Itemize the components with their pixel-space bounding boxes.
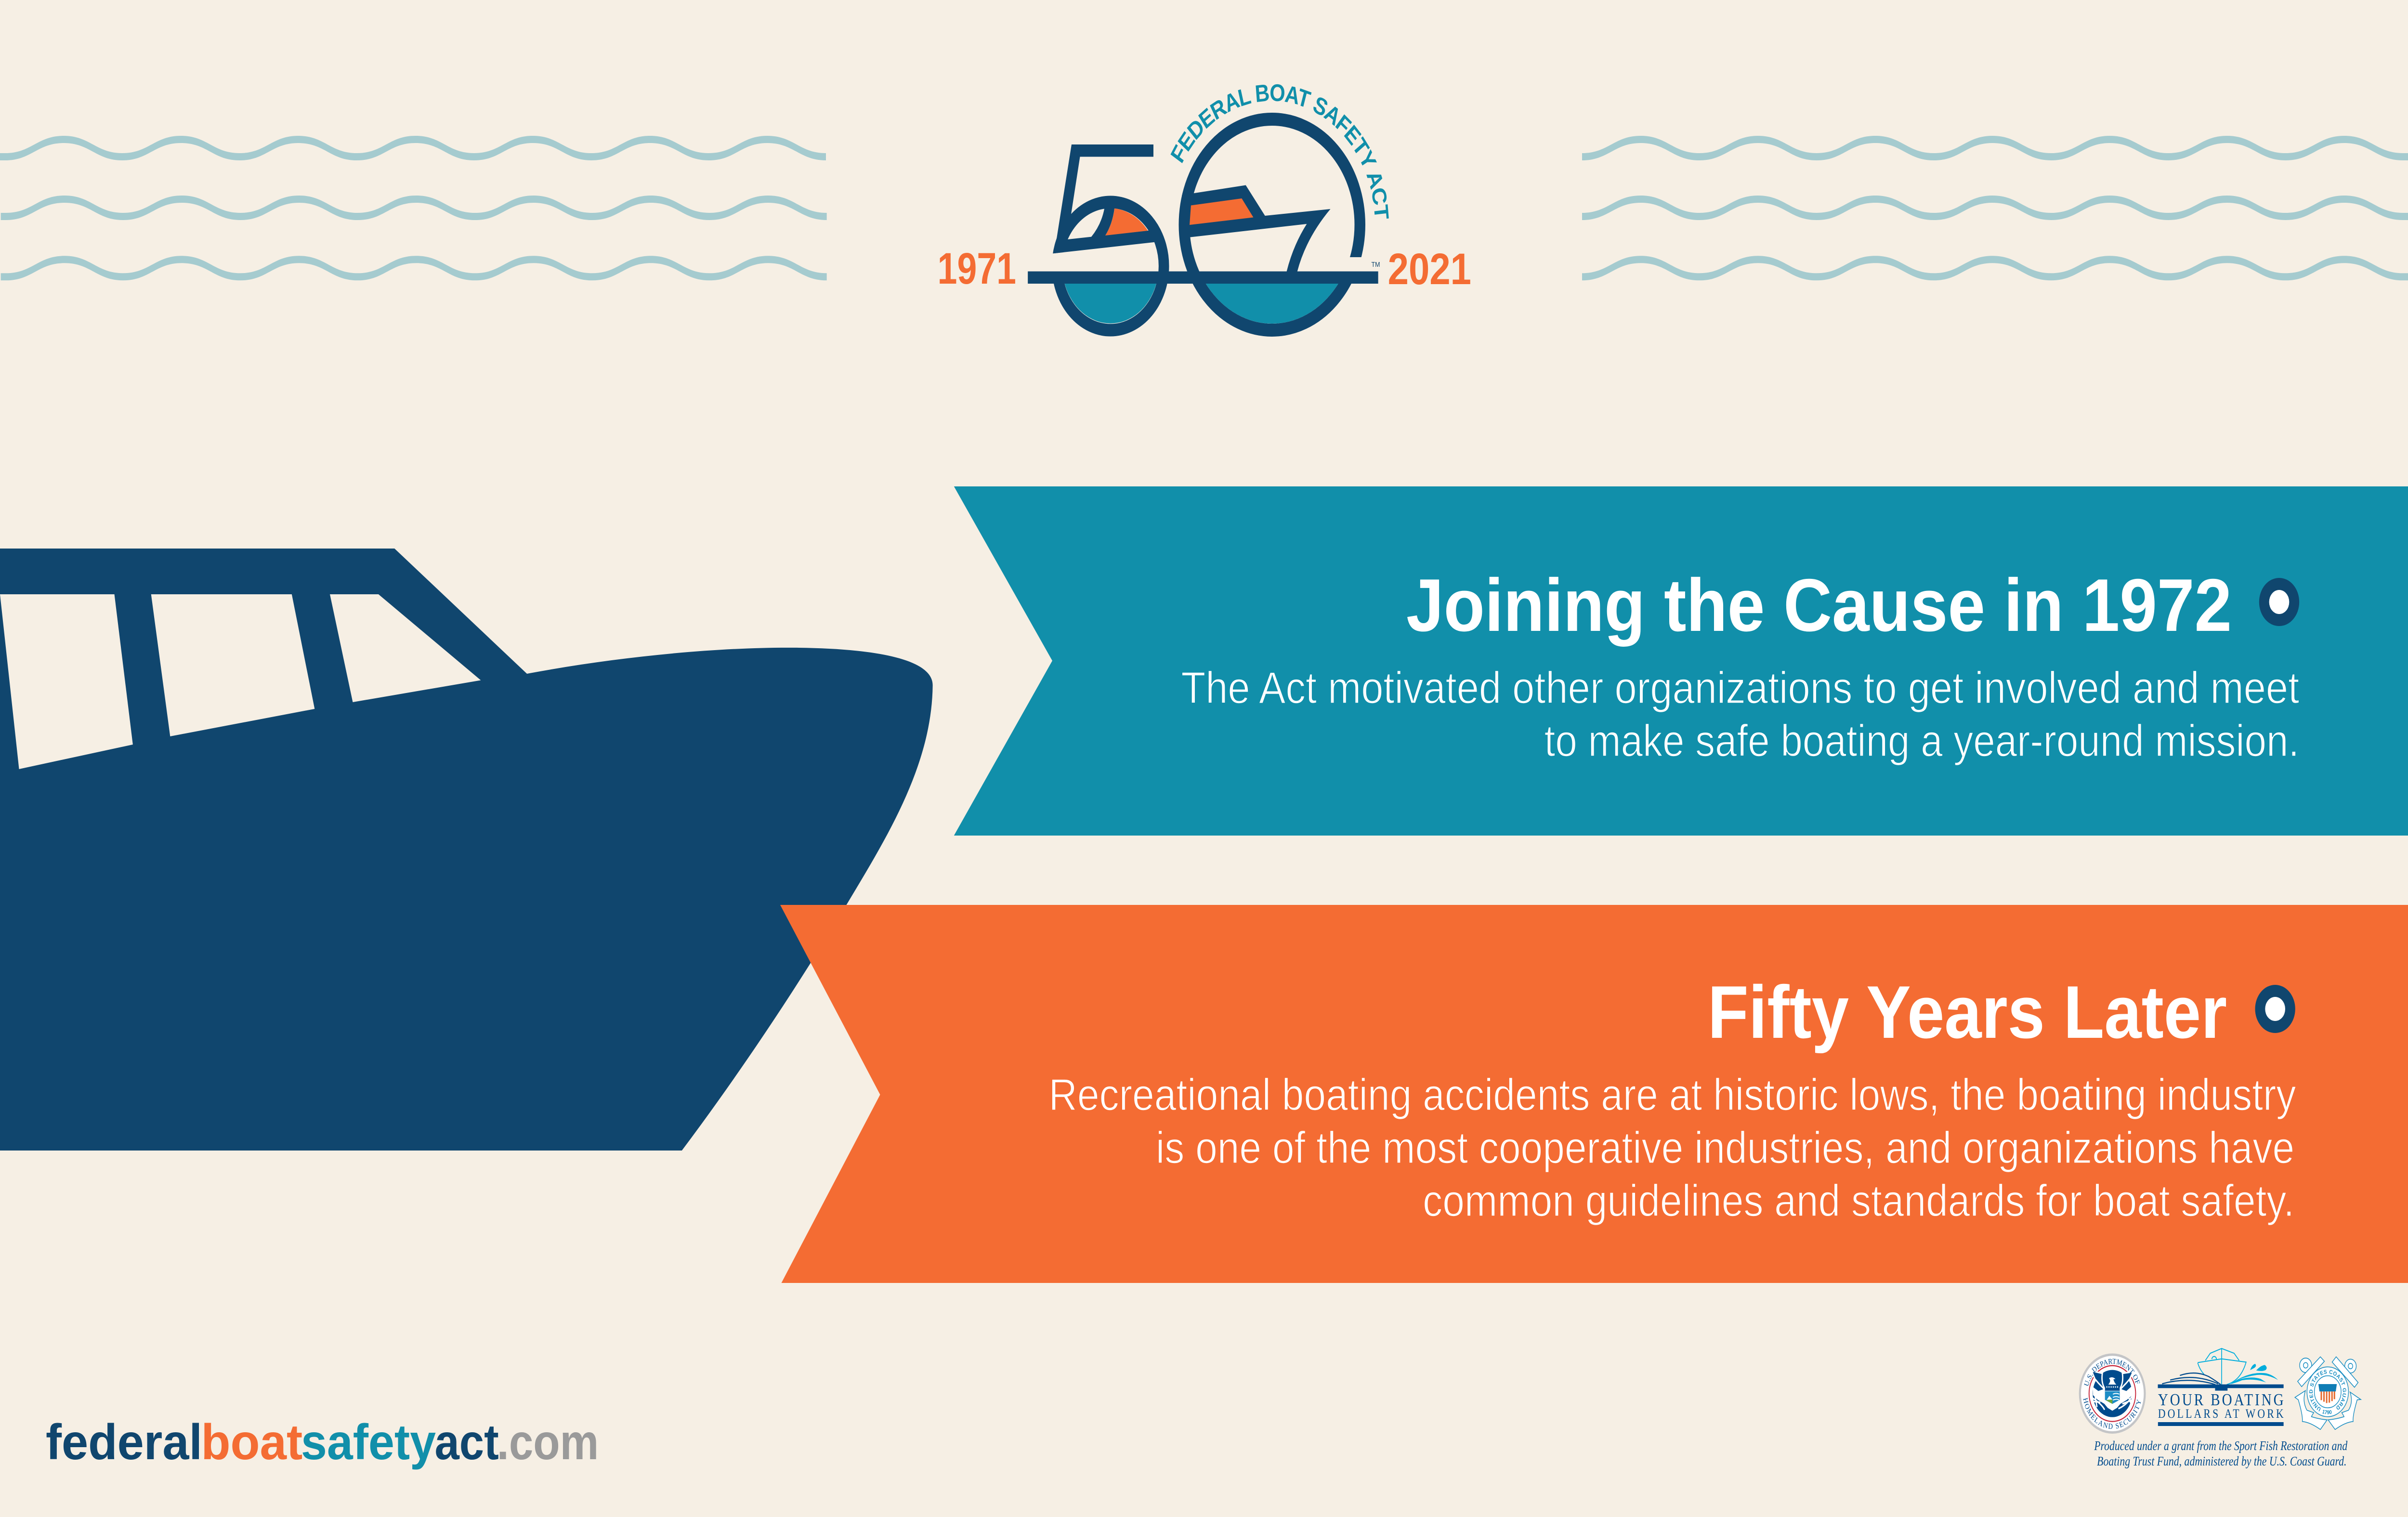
boat window 3 [330,594,481,702]
icon: coast guard emblem: UNITED STATES COAST GUARD [2309,1370,2346,1412]
icon: homeland security seal [2079,1353,2146,1434]
panel: orange ribbon, fifty years later [780,905,2408,1283]
body text: is one of the most cooperative industries, and organizations have [1156,1123,2294,1173]
website url: federal [46,1414,202,1470]
logo year 1971: 1971 [938,243,1016,293]
website url: safety [301,1414,436,1470]
logo baseline bar [1028,272,1378,284]
grant credit text: Produced under a grant from the Sport Fish Restoration and [2094,1439,2348,1453]
website url: .com [497,1414,599,1470]
heading: fifty years later: Fifty Years Later [1708,971,2227,1054]
body text [1181,663,2299,766]
bullet dot [2259,578,2299,626]
bullet dot [2255,985,2295,1033]
heading: joining the cause: Joining the Cause in 1972 [1406,564,2232,647]
boat hull and cabin [0,549,933,1151]
boat window 2 [151,594,314,736]
logo trademark: TM [1372,261,1380,268]
logo: your boating dollars at work [2158,1348,2284,1426]
body text: Recreational boating accidents are at historic lows, the boating industry [1049,1070,2296,1120]
logo year 2021: 2021 [1388,244,1471,294]
body text [1049,1070,2296,1226]
lower bar [2158,1422,2284,1426]
logo digit 0 with boat [1182,119,1371,330]
logo arc text: FEDERAL BOAT SAFETY ACT [1170,84,1389,219]
logo: 50th anniversary mark [938,84,1471,337]
waves: top right [1582,136,2408,280]
icon: coast guard emblem: 1790 [2322,1410,2332,1414]
website url: boat [201,1414,302,1470]
body text: common guidelines and standards for boat safety. [1423,1176,2294,1226]
boat window 1 [0,594,133,769]
body text: The Act motivated other organizations to get involved and meet [1181,663,2299,713]
panel: teal ribbon, joining the cause [954,486,2408,836]
icon: boat on open book [2158,1348,2284,1391]
icon: coast guard emblem [2294,1356,2362,1430]
grant credit text [2094,1439,2348,1469]
your boating: YOUR BOATING [2158,1390,2284,1409]
website url: act [434,1414,499,1470]
dollars at work: DOLLARS AT WORK [2158,1407,2284,1421]
grant credit text: Boating Trust Fund, administered by the U.S. Coast Guard. [2097,1454,2347,1469]
logo digit 5 [1039,144,1164,330]
website url [46,1414,599,1470]
icon: homeland security seal: U.S. DEPARTMENT OF [2084,1359,2140,1386]
orange ribbon shape [780,905,2408,1283]
icon: homeland security seal: HOMELAND SECURITY [2083,1398,2141,1429]
body text: to make safe boating a year-round mission. [1544,716,2299,766]
waves: top left [0,136,827,280]
teal ribbon shape [954,486,2408,836]
boat silhouette [0,549,933,1151]
